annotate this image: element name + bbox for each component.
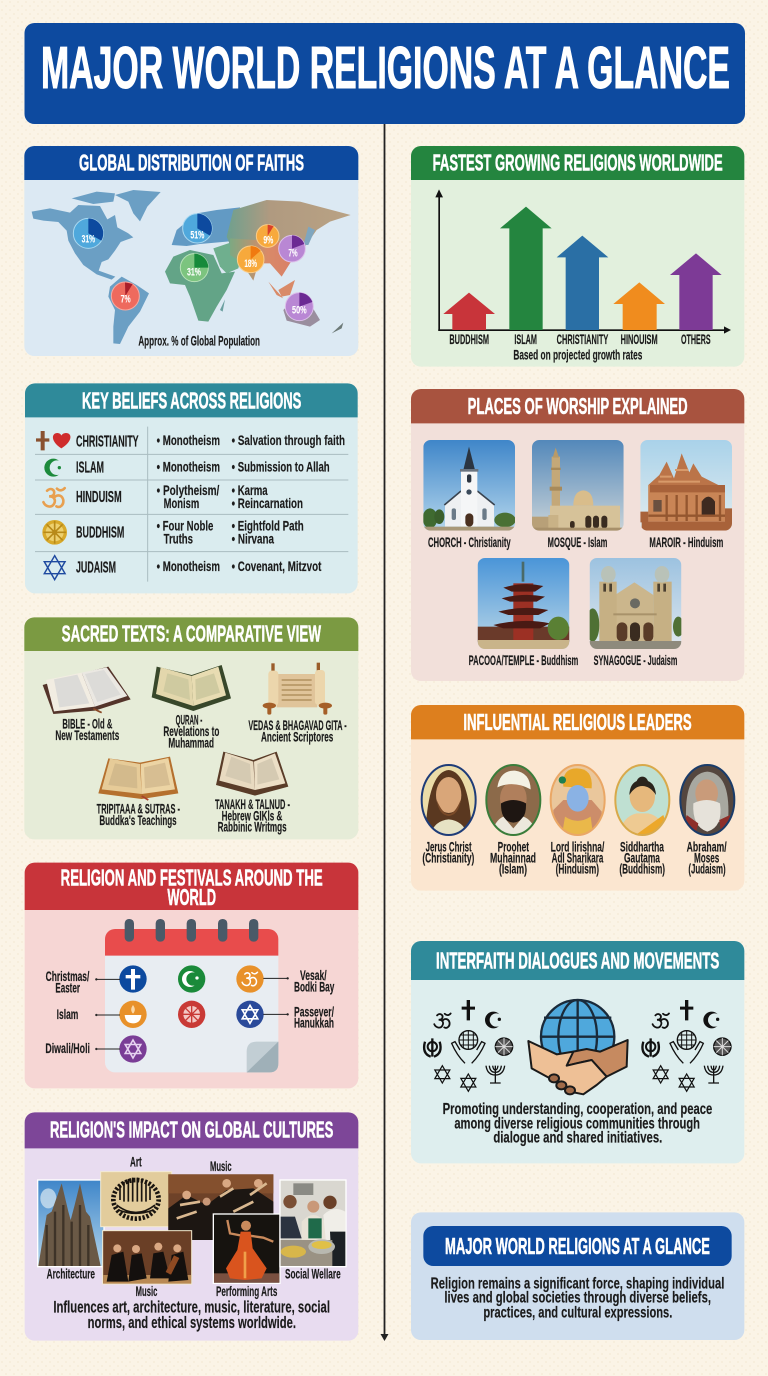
icon: cross and heart	[36, 431, 70, 450]
icon: om	[236, 965, 264, 993]
pie chart: 7% red	[111, 282, 139, 310]
icon: star of david	[44, 556, 65, 580]
photo captions: CHORCH - Christianity	[428, 535, 511, 550]
festival labels: Diwali/Holi	[45, 1041, 90, 1056]
leader name: prophet: Proohet	[498, 840, 529, 855]
festival labels: Christmas/	[46, 969, 89, 984]
photo: dancer	[213, 1214, 280, 1283]
belief column one: • Monotheism	[157, 432, 220, 448]
icon: cross	[119, 965, 147, 993]
festival connector lines	[95, 977, 289, 1050]
belief column one: Truths	[164, 531, 193, 547]
photo captions: Architecture	[47, 1267, 95, 1282]
photo captions: Music	[136, 1284, 158, 1299]
leader name: siddhartha: Gautama	[624, 851, 660, 866]
icon: handshake	[528, 1040, 628, 1094]
world map	[32, 190, 351, 344]
text: tanakh	[215, 797, 290, 835]
chart labels: OTHERS	[681, 332, 711, 347]
festival labels: Passever/	[294, 1004, 334, 1019]
photo: synagogue	[586, 558, 684, 649]
photo: calligraphy art	[101, 1172, 172, 1227]
belief column two: • Reincarnation	[232, 495, 303, 511]
belief column two	[232, 432, 345, 574]
portrait: buddha	[615, 763, 672, 837]
heading: KEY BELIEFS ACROSS RELIGIONS	[82, 387, 301, 413]
text: quran: Muhammad	[168, 735, 214, 750]
panel: places of worship	[411, 389, 744, 681]
heading: RELIGION'S IMPACT ON GLOBAL CULTURES	[50, 1117, 333, 1143]
panel: sacred texts	[24, 617, 358, 839]
chart labels	[449, 332, 711, 347]
belief column two: • Salvation through faith	[232, 432, 345, 448]
leader name: abraham	[687, 840, 727, 876]
belief column two: • Nirvana	[232, 531, 274, 547]
belief column two: • Submission to Allah	[232, 459, 330, 475]
icon: crescent	[44, 459, 64, 477]
portrait: jesus	[420, 763, 477, 837]
festival labels	[45, 968, 335, 1056]
text: tanakh: Hebrew GIKls &	[222, 809, 282, 824]
leader name: krishna: Lord lirishna/	[551, 840, 604, 855]
leader name: abraham: Abraham/	[687, 840, 727, 855]
leader name: siddhartha: Siddhartha	[620, 840, 664, 855]
text: vedas: Ancient Scriptores	[261, 730, 334, 745]
festival labels: Easter	[55, 980, 80, 995]
religion names: ISLAM	[76, 460, 104, 477]
religion names: HINDUISM	[76, 489, 122, 506]
leader name: krishna: Adl Sharikara	[552, 851, 604, 866]
description text: Influences art, architecture, music, literature, social	[53, 1299, 330, 1317]
text: quran: Revelations to	[163, 724, 219, 739]
pie chart: 31% green	[180, 254, 208, 282]
text: vedas: VEDAS & BHAGAVAD GITA -	[248, 718, 347, 733]
pie chart: 50%	[285, 293, 313, 321]
festival labels: Islam	[57, 1007, 78, 1022]
leader name: prophet: (Islam)	[499, 861, 527, 876]
photo captions: Performing Arts	[216, 1284, 278, 1299]
text: tanakh: Rabbinic Writmgs	[218, 820, 287, 835]
icon: om	[43, 488, 65, 507]
pie chart: 7% red: 7%	[121, 294, 131, 306]
leader name: krishna	[551, 840, 604, 876]
panel: influential religious leaders	[411, 705, 744, 891]
photo captions: Art	[130, 1155, 142, 1170]
portrait: abraham	[680, 763, 737, 837]
heading	[61, 865, 323, 910]
festival labels: Vesak/	[300, 968, 327, 983]
title banner	[24, 23, 745, 124]
text: tripitaka	[97, 801, 180, 828]
icon: star	[236, 1001, 264, 1028]
icon group: right faith symbols	[642, 1000, 731, 1091]
photo: pagoda	[478, 558, 569, 649]
conclusion text	[431, 1275, 724, 1321]
heading: RELIGION AND FESTIVALS AROUND THE	[61, 865, 323, 891]
chart axes	[435, 189, 731, 334]
belief column one	[157, 432, 220, 574]
leader name: abraham: Moses	[694, 851, 720, 866]
text: quran	[163, 712, 219, 750]
text: quran: QURAN -	[176, 712, 202, 727]
chart labels: HINOUISM	[621, 332, 658, 347]
leader name: abraham: (Judaism)	[688, 861, 726, 876]
portrait: prophet	[485, 763, 542, 837]
text: bible: BIBLE - Old &	[62, 716, 112, 731]
belief column two: • Karma	[232, 482, 268, 498]
panel: conclusion	[411, 1212, 744, 1340]
belief column two: • Covenant, Mitzvot	[232, 558, 322, 574]
photo captions	[47, 1155, 341, 1299]
conclusion title bar	[423, 1226, 732, 1266]
conclusion text: practices, and cultural expressions.	[483, 1304, 672, 1321]
leader name: prophet	[490, 840, 536, 876]
leader name: siddhartha: (Buddhism)	[619, 861, 665, 876]
religion names: JUDAISM	[76, 560, 116, 577]
text: bible: New Testaments	[55, 728, 120, 743]
chart caption: Based on projected growth rates	[513, 347, 643, 362]
pie chart: 51%	[183, 214, 212, 243]
photo captions: PACOOA/TEMPLE - Buddhism	[469, 653, 578, 668]
text: tanakh: TANAKH & TALNUD -	[215, 797, 290, 812]
icon: dharma wheel	[42, 520, 67, 545]
arrow bar: buddhism	[443, 293, 495, 330]
photo: orchestra bottom	[103, 1231, 192, 1284]
panel: global distribution of faiths	[24, 146, 358, 356]
festival labels: Bodki Bay	[294, 980, 335, 995]
belief column two: • Eightfold Path	[232, 518, 304, 534]
photo: church	[423, 440, 516, 531]
arrow bar: others	[670, 253, 722, 330]
leader name: jesus	[422, 840, 474, 866]
leader name: krishna: (Hinduism)	[556, 861, 599, 876]
photo: social welfare	[280, 1180, 346, 1267]
heading: WORLD	[167, 884, 216, 910]
leader name: prophet: Muhainnad	[490, 851, 536, 866]
icon: globe	[541, 1000, 614, 1073]
belief column one: • Four Noble	[157, 518, 213, 534]
icon: lamp	[119, 1001, 147, 1028]
portrait: krishna	[550, 763, 607, 837]
pie chart: 18%: 18%	[244, 258, 257, 270]
leader name: siddhartha	[619, 840, 665, 876]
text: vedas	[248, 718, 347, 745]
festival labels: Hanukkah	[294, 1016, 334, 1031]
pie chart: 51%: 51%	[190, 229, 205, 241]
calendar	[105, 919, 278, 1072]
pie chart: 7% purple	[279, 235, 305, 262]
religion names: CHRISTIANITY	[76, 433, 139, 450]
description text: norms, and ethical systems worldwide.	[88, 1314, 296, 1332]
illustration: tanakh	[216, 752, 288, 796]
panel: religion and festivals	[25, 863, 358, 1088]
photo: mandir	[640, 440, 732, 531]
text: tripitaka: TRIPITAAA & SUTRAS -	[97, 801, 180, 816]
pie chart: 50%: 50%	[292, 305, 307, 317]
illustration: scroll	[263, 663, 332, 715]
belief column one: • Monotheism	[157, 459, 220, 475]
icon: crescent	[178, 965, 205, 993]
icon: wheel	[178, 1001, 205, 1028]
pie chart: 7% purple: 7%	[288, 248, 298, 260]
icon group: left faith symbols	[424, 1000, 513, 1091]
photo captions: SYNAGOGUE - Judaism	[594, 653, 677, 668]
illustration: bible	[43, 667, 131, 714]
photo captions: Social Wellare	[285, 1267, 341, 1282]
photo: architecture	[38, 1180, 104, 1267]
pie chart: 31%: 31%	[82, 233, 95, 245]
pie chart: 9%: 9%	[263, 234, 274, 246]
arrow bar: hinduism	[613, 282, 665, 330]
belief column one: Monism	[164, 495, 199, 511]
pie chart: 18%	[237, 246, 264, 273]
pie chart: 31%	[73, 218, 103, 248]
text: bible	[55, 716, 120, 743]
photo captions: Music	[210, 1159, 232, 1174]
leader name: jesus: (Christianity)	[422, 851, 474, 866]
panel: interfaith dialogues	[411, 941, 744, 1163]
description text	[53, 1299, 330, 1332]
description text	[443, 1101, 712, 1147]
chart labels: CHRISTIANITY	[557, 332, 608, 347]
photo captions	[428, 535, 723, 668]
heading: SACRED TEXTS: A COMPARATIVE VIEW	[62, 621, 321, 647]
pie chart: 31% green: 31%	[187, 267, 201, 279]
icon: purple star	[119, 1035, 147, 1063]
panel: fastest growing religions	[411, 146, 744, 367]
illustration: tripitaka	[98, 757, 178, 800]
pie chart: 9%	[256, 225, 279, 247]
heading: GLOBAL DISTRIBUTION OF FAITHS	[79, 150, 304, 176]
photo captions: MOSQUE - Islam	[548, 535, 607, 550]
belief column one: • Polytheism/	[157, 482, 219, 498]
photo: orchestra top	[168, 1174, 273, 1240]
chart labels: BUDDHISM	[449, 332, 489, 347]
map caption: Approx. % of Global Population	[138, 334, 260, 349]
leader name: jesus: Jerus Christ	[426, 840, 472, 855]
description text: dialogue and shared initiatives.	[493, 1130, 662, 1147]
arrow bar: islam	[500, 207, 552, 330]
panel: key beliefs across religions	[25, 383, 358, 593]
illustration: quran	[152, 665, 231, 711]
religion names: BUDDHISM	[76, 524, 124, 541]
text: tripitaka: Buddka's Teachings	[99, 813, 177, 828]
chart labels: ISLAM	[514, 332, 537, 347]
central timeline arrow	[380, 124, 388, 1341]
belief column one: • Monotheism	[157, 558, 220, 574]
arrow bar: christianity	[557, 236, 608, 330]
photo: mosque	[532, 440, 624, 531]
religion names	[76, 433, 139, 577]
panel: impact on global cultures	[25, 1112, 358, 1341]
